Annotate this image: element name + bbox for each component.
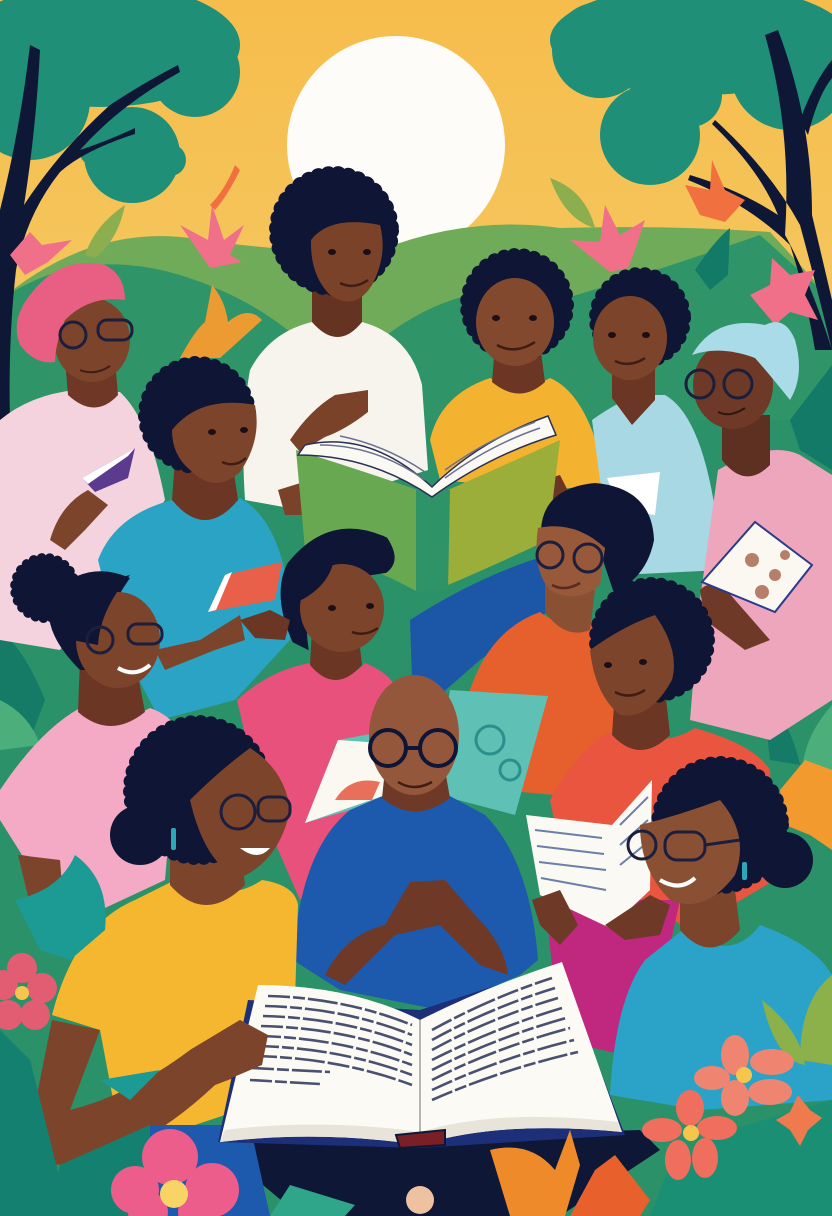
foreground legs xyxy=(245,1130,660,1216)
person: bald man in blue shirt xyxy=(293,675,538,1010)
foreground plants left xyxy=(0,855,239,1216)
foreground plants right xyxy=(642,975,832,1216)
person: woman in coral shirt xyxy=(545,584,775,1060)
large green book xyxy=(296,416,560,592)
flower: pink left xyxy=(0,953,57,1030)
person: older woman in blue headwrap xyxy=(686,322,832,740)
person: seated legs in blue xyxy=(410,555,550,695)
person: woman in yellow shirt xyxy=(430,255,607,510)
book: teal magazine xyxy=(305,690,548,823)
blue skirt xyxy=(150,1125,270,1216)
person: man in white sweater xyxy=(243,174,428,515)
background plants and flowers xyxy=(0,160,832,850)
flower: coral small xyxy=(642,1090,737,1180)
person: girl in pink shirt with small book xyxy=(208,532,402,900)
person: reader in cyan shirt xyxy=(98,363,290,720)
tree: right xyxy=(550,0,832,350)
person: woman with bun in pink shirt xyxy=(0,558,245,925)
large open book with text xyxy=(218,962,625,1148)
person: woman with pink headwrap xyxy=(0,263,165,650)
book text lines xyxy=(250,978,578,1100)
person: woman in yellow shirt foreground xyxy=(29,722,298,1165)
open book: held notebook xyxy=(526,780,670,945)
foreground flowers bottom centre xyxy=(270,1130,650,1216)
person: short hair woman in orange xyxy=(470,485,652,800)
background: sky xyxy=(0,0,832,420)
flower: coral large xyxy=(694,1035,794,1116)
person: woman in cyan shirt foreground right xyxy=(610,763,832,1110)
sun xyxy=(287,36,505,254)
flower: orange small xyxy=(776,1095,822,1146)
flower: pink bottom xyxy=(111,1129,239,1216)
hand on large book xyxy=(190,1020,268,1085)
person: man in pale blue shirt xyxy=(592,274,722,575)
tree: left xyxy=(0,0,240,420)
